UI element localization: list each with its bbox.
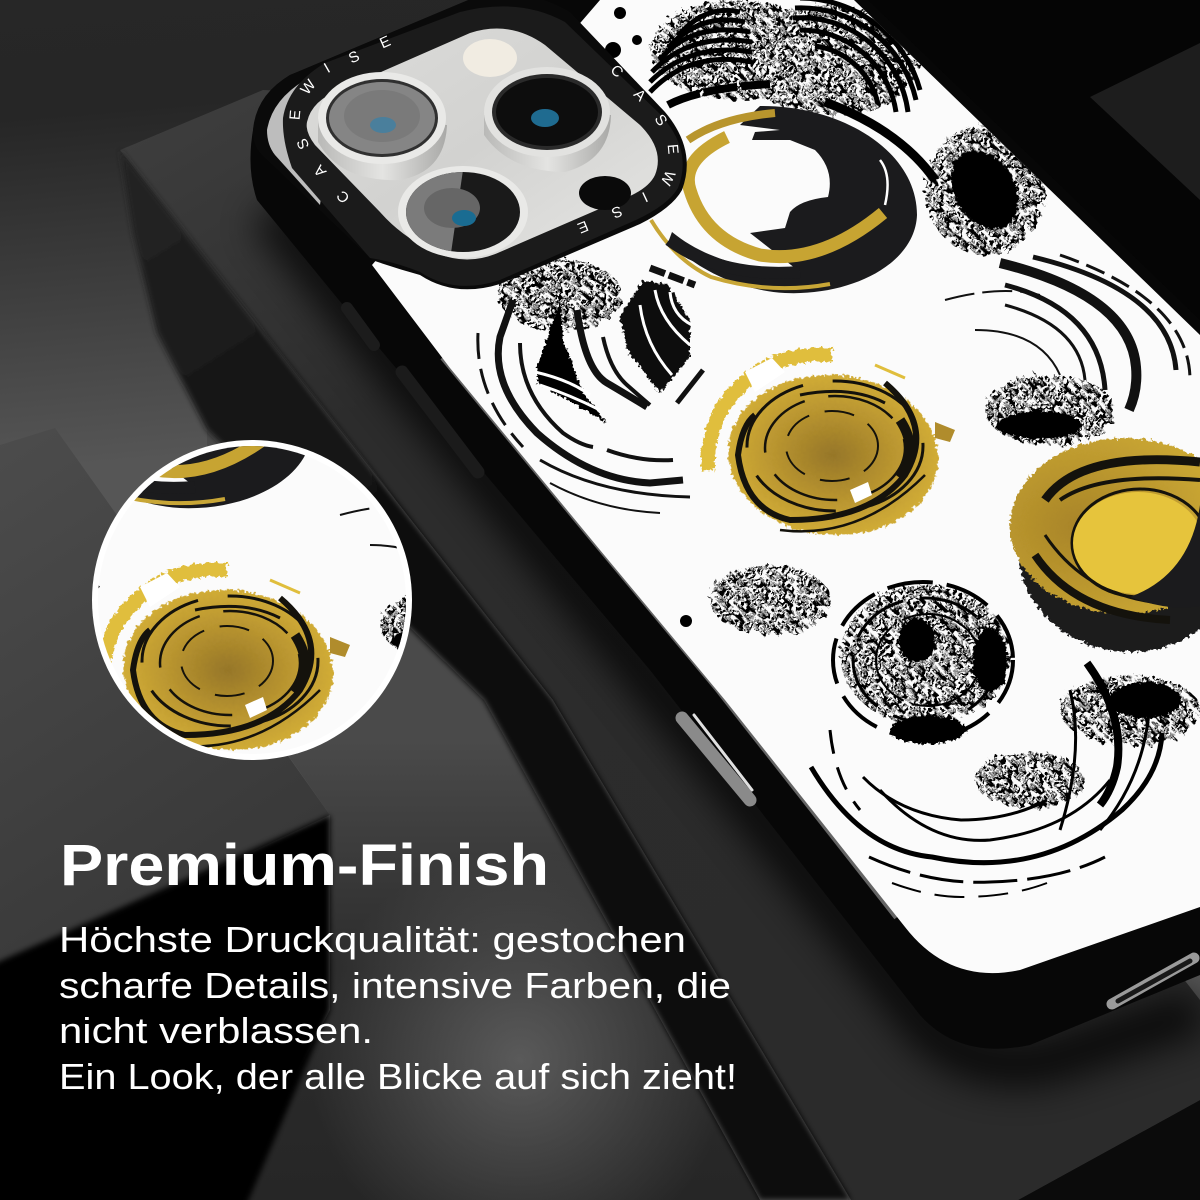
- brand lettering on ring: S: [294, 136, 313, 152]
- body text: Höchste Druckqualität: gestochen: [59, 919, 686, 960]
- brand lettering on ring: E: [664, 143, 681, 155]
- body text: nicht verblassen.: [59, 1010, 373, 1051]
- striped brush: top left: [650, 10, 770, 105]
- body text: scharfe Details, intensive Farben, die: [59, 965, 731, 1006]
- gold disc centre: [708, 354, 955, 542]
- camera island: [253, 0, 687, 289]
- brand lettering on ring: C: [607, 62, 627, 81]
- brand lettering on ring: A: [630, 86, 649, 105]
- gold disc right: [1010, 438, 1200, 652]
- swirl rings: left: [478, 268, 703, 513]
- brand lettering on ring: S: [609, 202, 625, 221]
- brand lettering on ring: E: [575, 217, 591, 236]
- side button: silver: [682, 718, 750, 800]
- body text: Ein Look, der alle Blicke auf sich zieht!: [59, 1056, 737, 1097]
- microphone: [579, 176, 631, 210]
- brand lettering on ring: C: [333, 187, 353, 206]
- big black brush ring with gold: [651, 106, 917, 293]
- phone artwork surface: [360, 0, 1200, 1000]
- phone shadow: [270, 210, 1200, 1064]
- island outer rim: [253, 0, 687, 289]
- swirl rings: lower: [811, 582, 1162, 897]
- brand lettering on ring: [287, 33, 681, 236]
- lens bottom: [398, 160, 528, 260]
- swirl rings: right: [945, 255, 1190, 410]
- brand lettering on ring: W: [297, 76, 320, 98]
- side button: small: [347, 308, 374, 345]
- flash: [463, 39, 517, 77]
- brand lettering on ring: S: [651, 111, 670, 129]
- striped brush: top right: [793, 0, 935, 180]
- island light gap: [267, 62, 340, 205]
- side button: long: [402, 372, 478, 472]
- brand lettering on ring: A: [311, 161, 330, 180]
- charging port: [1112, 958, 1194, 1004]
- lens upper right: [484, 67, 611, 172]
- brand lettering on ring: I: [639, 188, 650, 205]
- inset magnifier circle: [92, 440, 412, 760]
- brand lettering on ring: S: [346, 48, 362, 67]
- black splatter areas: [498, 0, 1200, 808]
- rim highlight: [442, 358, 896, 918]
- phone case body: [250, 0, 1200, 1049]
- brand lettering on ring: I: [321, 60, 333, 77]
- camera glass: [307, 29, 658, 260]
- body text: [59, 919, 737, 1097]
- lens upper left: [318, 72, 447, 180]
- brand lettering on ring: E: [377, 33, 393, 52]
- brand lettering on ring: E: [287, 109, 304, 121]
- heading: Premium-Finish: [60, 833, 549, 898]
- brand lettering on ring: W: [656, 168, 678, 189]
- island lettered ring: [283, 6, 683, 286]
